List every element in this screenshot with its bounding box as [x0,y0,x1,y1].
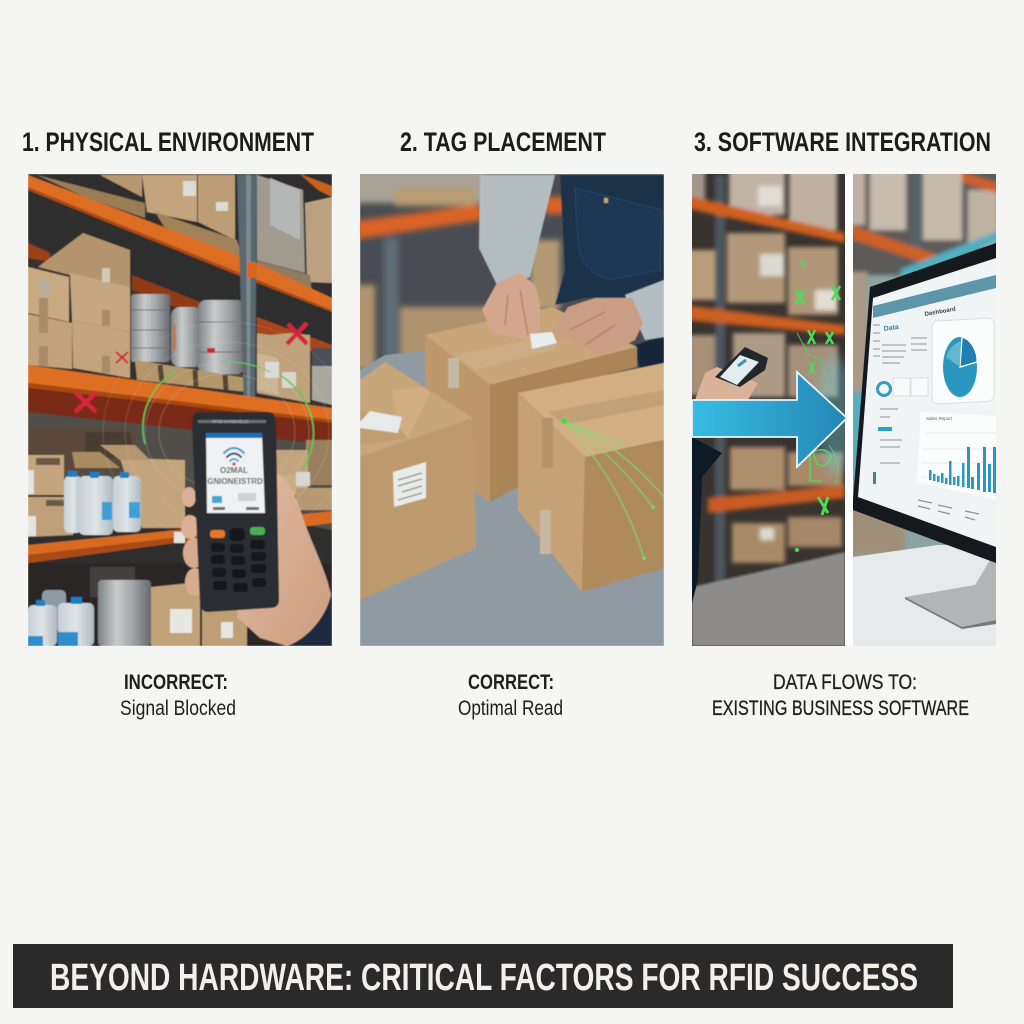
right box [518,363,664,592]
panel: correct tag placement on boxes [350,165,664,646]
glow behind arrow [817,355,853,475]
caption: data flows [712,671,969,720]
bottom shelf stock [28,567,247,646]
dashboard sidebar and tables [873,325,927,463]
caption: correct [458,671,563,720]
icon: hand holding scanner [181,473,332,646]
caption: incorrect [120,671,236,720]
monitor screen dashboard [858,258,996,547]
icon: RFID handheld scanner [192,412,279,612]
lower shelf stock [28,440,332,537]
shipping label on flap [360,411,402,433]
panel: warehouse shelves with blocked signal [28,174,351,646]
pie chart card [932,318,994,404]
hands applying tag [482,273,643,355]
red X marks [75,323,307,412]
caption: correct: Optimal Read [458,697,563,720]
left box stack [28,233,130,378]
worker sleeves [479,175,664,340]
dashboard header text: Data [883,324,899,333]
divider between scan and software scenes [845,174,853,646]
monitor frame [853,243,996,563]
caption: data flows: DATA FLOWS TO: [773,671,917,694]
scanner screen: GNIONEISTRD [207,477,263,486]
worker dark torso [692,437,722,603]
shelf beam: middle [28,365,332,420]
signal rings [102,322,332,532]
desk surface [853,545,996,646]
scanner screen: O2MAL [220,466,248,475]
panel: monitor with business software [845,165,1005,646]
small stat cards [893,378,928,396]
scanner keypad [210,527,266,592]
dashboard header text [883,307,957,333]
panel: scanner in warehouse with data arrow [692,174,845,646]
left small text blocks [873,427,892,484]
heading: physical environment: 1. PHYSICAL ENVIRONMENT [22,127,314,157]
blurred warehouse backdrop [845,165,1005,555]
icon: hand holding mobile scanner [695,347,768,400]
arrow: data flow to software [692,372,847,467]
scanner screen [206,433,265,513]
warehouse floor [692,552,845,646]
metal barrels [131,294,245,374]
center box [425,307,637,502]
green data particles [795,262,840,552]
shipping label on front [393,462,426,507]
shelf beam: top [28,175,332,312]
dashboard header text: Dashboard [924,307,957,318]
shelf beam: lower [28,528,197,563]
caption: correct: CORRECT: [468,671,554,694]
icon: RFID handheld scanner: RFID HANDHELD [212,419,249,424]
caption: incorrect: INCORRECT: [124,671,228,694]
RFID tag on center box [530,332,557,349]
table surface [360,350,664,646]
top shelf stock [37,175,332,292]
blurred warehouse shelves [685,165,845,595]
wifi icon [224,448,244,466]
worker apron [555,175,664,372]
caption: incorrect: Signal Blocked [120,697,236,720]
bars [929,447,996,493]
title banner [13,944,953,1008]
bottles on lower shelf [64,471,141,535]
pallet under barrels [135,360,247,392]
blurred warehouse background [350,165,565,370]
green read signal rays [561,418,664,560]
pie chart [943,337,977,397]
left box with folded flap [360,362,476,600]
monitor stand [905,560,996,629]
heading: tag placement: 2. TAG PLACEMENT [400,127,606,157]
right stock [257,333,332,405]
upright column [237,175,257,410]
donut mini chart [878,382,890,396]
under-shelf shadow band [28,388,332,445]
dashboard footer text [918,500,979,520]
bar chart card [917,412,996,500]
bar chart card: Sales Report [926,416,953,421]
